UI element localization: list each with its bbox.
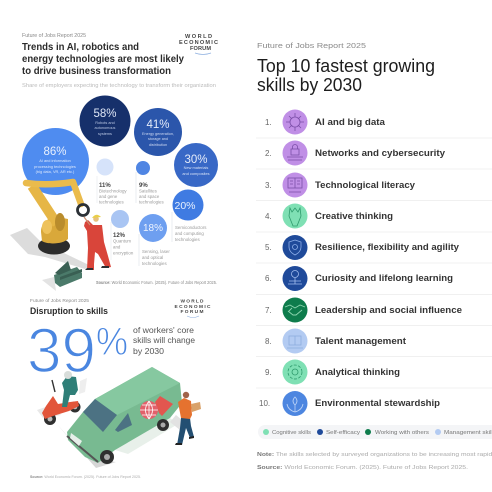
- heading: [257, 55, 435, 95]
- illustration: worker: [84, 215, 111, 270]
- bubble: 86% AI: AI and information: [39, 158, 71, 163]
- legend: [258, 425, 492, 439]
- bubble: 18% sensing: technologies: [142, 261, 167, 266]
- illustration: toolbox: [42, 261, 82, 291]
- bubble: 58% robots: [80, 96, 130, 146]
- statement: by 2030: [133, 347, 165, 356]
- bubble: 18% sensing: 18%: [143, 223, 163, 234]
- skill 5: Resilience, flexibility and agility: [315, 242, 460, 253]
- skill 9: Analytical thinking: [315, 367, 400, 378]
- heading: skills by 2030: [257, 74, 362, 95]
- skill 4: 4.: [265, 212, 272, 221]
- row dividers: [256, 138, 492, 388]
- bubble: 20% semiconductors: Semiconductors: [175, 225, 207, 230]
- bubble: 18% sensing: Sensing, laser: [142, 249, 170, 254]
- illustration: green van: [56, 367, 188, 468]
- bubble: 9% satellites: 9%: [139, 183, 148, 189]
- skill 3: 3.: [265, 181, 272, 190]
- skill 6: [265, 266, 453, 291]
- WEF logo: [174, 298, 211, 318]
- skill 6: 6.: [265, 274, 272, 283]
- bubble: 86% AI: (big data, VR, AR etc.): [36, 169, 75, 174]
- statement: skills will change: [133, 336, 196, 345]
- bubble: 41% energy: [134, 108, 182, 156]
- skill 8: Talent management: [315, 336, 407, 347]
- skill 4: Creative thinking: [315, 211, 393, 222]
- bubble: 18% sensing: and optical: [142, 255, 163, 260]
- source note: Source: World Economic Forum. (2025). Future of Jobs Report 2025.: [30, 474, 141, 479]
- big number 39%: %: [96, 321, 128, 364]
- report label: Future of Jobs Report 2025: [257, 43, 366, 50]
- van logo: globe and arrow: [140, 396, 173, 419]
- illustration: courier: [175, 392, 201, 445]
- note and source: Note: The skills selected by surveyed organizations to be increasing most rapidly: [257, 452, 492, 458]
- legend: Self-efficacy: [326, 430, 360, 436]
- WEF logo: FORUM: [190, 46, 211, 52]
- bubble: 11% biotechnology: [96, 158, 127, 204]
- skill 7: 7.: [265, 306, 272, 315]
- skill 3: Technological literacy: [315, 180, 416, 191]
- bubble: 30% materials: [174, 143, 218, 187]
- legend: Management skills: [444, 430, 492, 436]
- bubble: 41% energy: 41%: [146, 119, 170, 131]
- bubble: 12% quantum: and: [113, 244, 121, 250]
- legend: Cognitive skills: [272, 430, 311, 436]
- bubble: 86% AI: [22, 128, 89, 195]
- heading: energy technologies are most likely: [22, 53, 184, 65]
- illustration: robot arm: [10, 182, 91, 269]
- bubble: 30% materials: New materials: [184, 165, 208, 170]
- skill 1: AI and big data: [315, 117, 386, 128]
- heading: Trends in AI, robotics and: [22, 41, 139, 53]
- big number 39%: [27, 316, 128, 386]
- skill 8: 8.: [265, 337, 272, 346]
- bubble: 58% robots: autonomous: [95, 126, 116, 130]
- bubble: 12% quantum: Quantum: [113, 238, 131, 244]
- bubble: 20% semiconductors: technologies: [175, 237, 200, 242]
- bubble: 41% energy: Energy generation,: [142, 132, 174, 136]
- panel: top 10 skills: [256, 43, 492, 471]
- source note: Source: World Economic Forum. (2025). Future of Jobs Report 2025.: [96, 280, 217, 285]
- bubble: 9% satellites: and space: [139, 194, 160, 199]
- skill 5: [265, 235, 460, 260]
- heading: to drive business transformation: [22, 65, 171, 77]
- big number 39%: 39: [27, 316, 96, 386]
- heading: Disruption to skills: [30, 306, 108, 316]
- bubble: 58% robots: 58%: [93, 108, 117, 120]
- skill 5: 5.: [265, 243, 272, 252]
- skill 1: [265, 110, 386, 134]
- legend: Working with others: [375, 430, 429, 436]
- skill 3: [265, 172, 416, 198]
- panel: technology trends: [10, 33, 218, 291]
- bubble: 41% energy: storage and: [148, 137, 168, 141]
- skill 10: [259, 391, 440, 416]
- skill 9: 9.: [265, 368, 272, 377]
- WEF logo: FORUM: [180, 309, 204, 315]
- skill 10: Environmental stewardship: [315, 398, 440, 409]
- WEF logo: ECONOMIC: [174, 304, 211, 310]
- bubble: 58% robots: Robots and: [95, 121, 115, 125]
- skill 9: [265, 360, 400, 384]
- bubble: 30% materials: 30%: [184, 154, 208, 166]
- bubble: 12% quantum: 12%: [113, 233, 126, 239]
- WEF logo: WORLD: [180, 298, 204, 304]
- note and source: [257, 452, 492, 471]
- bubble: 86% AI: 86%: [43, 146, 67, 158]
- bubble: 9% satellites: technologies: [139, 200, 164, 204]
- bubble: 86% AI: processing technologies: [34, 164, 76, 169]
- bubble: 58% robots: systems: [98, 132, 112, 136]
- statement: [133, 326, 196, 356]
- WEF logo: ECONOMIC: [179, 40, 218, 46]
- bubble: 30% materials: and composites: [182, 171, 210, 176]
- bubble: 20% semiconductors: 20%: [174, 200, 196, 212]
- skill 2: [265, 140, 446, 166]
- subtitle: Share of employers expecting the technology to transform their organization: [22, 83, 216, 89]
- heading: [22, 41, 184, 77]
- bubble: 20% semiconductors: [172, 190, 207, 242]
- panel: disruption to skills: [27, 298, 211, 479]
- WEF logo: WORLD: [185, 34, 212, 40]
- report label: Future of Jobs Report 2025: [22, 33, 86, 39]
- statement: of workers' core: [133, 326, 195, 335]
- WEF logo: [179, 34, 218, 54]
- bubble: 18% sensing: [139, 214, 170, 266]
- bubble: 41% energy: distribution: [149, 143, 167, 147]
- skill 6: Curiosity and lifelong learning: [315, 273, 453, 284]
- illustration: scooter rider: [37, 371, 87, 425]
- skill 7: Leadership and social influence: [315, 305, 462, 316]
- skill 8: [265, 328, 407, 354]
- bubble: 20% semiconductors: and computing: [175, 231, 204, 236]
- skill 4: [265, 204, 393, 228]
- skill 10: 10.: [259, 399, 270, 408]
- bubble: 11% biotechnology: technologies: [99, 200, 124, 204]
- bubble: 11% biotechnology: and gene: [99, 194, 118, 199]
- skill 7: [265, 298, 462, 322]
- note and source: Source: World Economic Forum. (2025). Future of Jobs Report 2025.: [257, 465, 469, 471]
- skill 2: Networks and cybersecurity: [315, 148, 446, 159]
- bubble: 11% biotechnology: Biotechnology: [99, 188, 127, 194]
- report label: Future of Jobs Report 2025: [30, 298, 90, 303]
- heading: Top 10 fastest growing: [257, 55, 435, 76]
- bubble: 9% satellites: Satellites: [139, 188, 158, 194]
- bubble: 12% quantum: encryption: [113, 250, 134, 256]
- bubble: 9% satellites: [136, 161, 164, 204]
- skill 1: 1.: [265, 118, 272, 127]
- skill 2: 2.: [265, 149, 272, 158]
- bubble: 11% biotechnology: 11%: [99, 183, 111, 189]
- bubble: 12% quantum: [111, 210, 134, 260]
